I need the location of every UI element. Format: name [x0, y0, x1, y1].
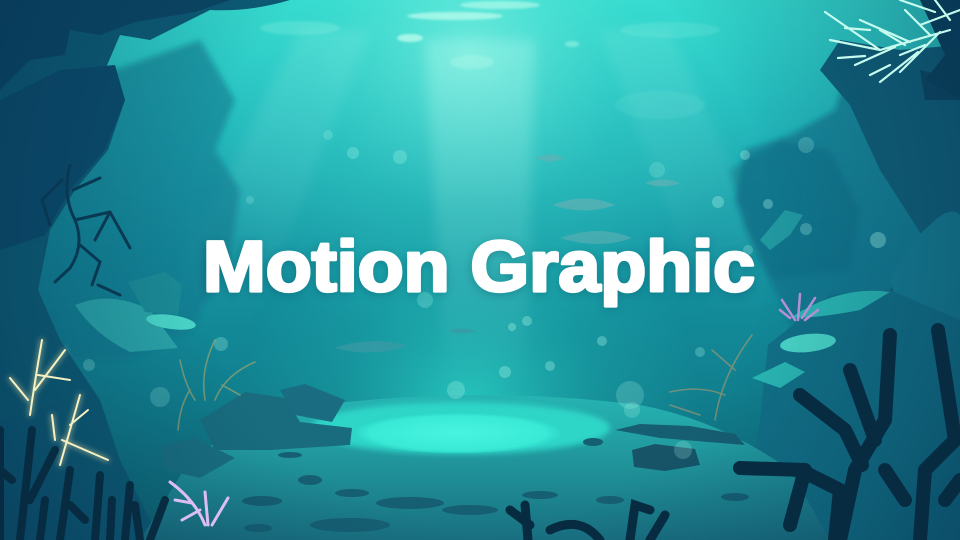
glowing pool: [355, 413, 561, 453]
seabed: [140, 395, 830, 540]
rocks on the seabed: [160, 384, 745, 478]
bubbles: [83, 130, 886, 459]
glowing coral bottom left: [10, 340, 108, 465]
distant fish: [335, 154, 680, 353]
light rays: [150, 30, 800, 390]
title: Motion Graphic: [203, 228, 755, 307]
pink coral right: [780, 294, 818, 320]
white coral top right: [825, 0, 960, 82]
right cave wall: [740, 0, 960, 540]
dark foreground coral bottom left: [0, 430, 165, 540]
left cave wall: [0, 0, 290, 540]
surface highlights: [260, 1, 720, 119]
title shadow: Motion Graphic: [201, 230, 756, 309]
dark foreground coral bottom center: [510, 505, 665, 540]
pink coral bottom: [170, 482, 228, 525]
golden sea plants: [178, 340, 255, 430]
dark foreground coral bottom right: [740, 330, 960, 540]
branching dark roots: [42, 165, 130, 295]
far background rocks: [0, 40, 960, 400]
